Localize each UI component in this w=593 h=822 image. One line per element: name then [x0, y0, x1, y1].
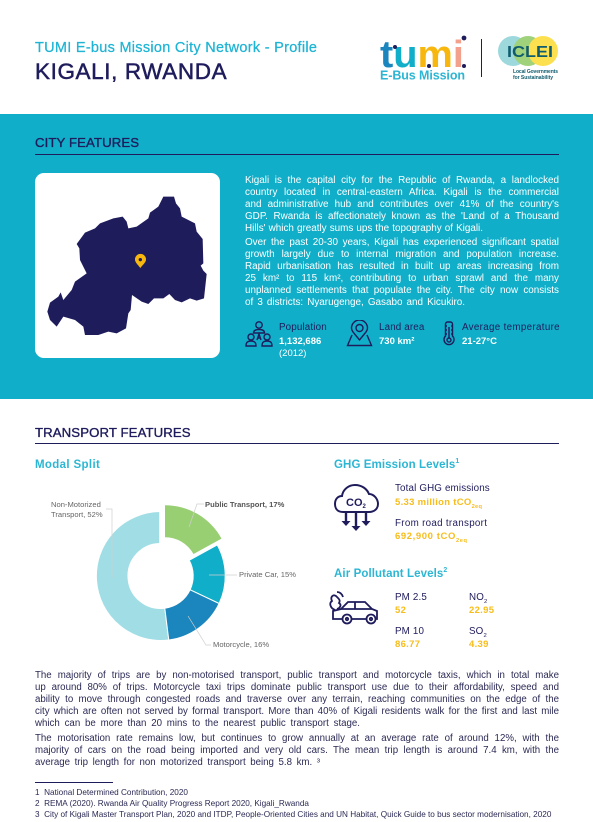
text: city description: of 3 districts: Nyarugenge, Gasabo and Kicukiro. — [245, 297, 465, 308]
stat: PM 2.5: 52 — [395, 605, 406, 616]
text: transport description: average trip length for non motorized transport being 5.8 km. ³ — [35, 757, 320, 768]
stat: total GHG emissions — [395, 483, 490, 510]
slice: public transport 17% — [165, 505, 222, 554]
map of Rwanda with Kigali pin — [47, 196, 207, 335]
subtitle: TUMI E-bus Mission City Network - Profile — [35, 40, 317, 56]
text: city description: unplanned settlements that populate the city. The city now consists — [245, 285, 559, 296]
stat: average temperature: 21-27°C — [462, 336, 497, 347]
stat: road transport emissions: 692,900 tCO2eq — [395, 531, 468, 544]
icon: CO2 cloud — [334, 484, 379, 531]
text: city description: GDP. Rwanda is affectionately known as the 'Land of a Thousand — [245, 211, 559, 222]
footnotes — [35, 782, 552, 819]
stat: road transport emissions — [395, 518, 487, 544]
logo: TUMI E-Bus Mission: tumi — [380, 34, 464, 76]
text: city description: and administrative hub and contributes over 41% of the country's — [245, 199, 559, 210]
label: non-motorized — [51, 500, 103, 519]
label: non-motorized: Non-Motorized — [51, 500, 101, 509]
text: city description: growth largely due to internal migration and population increase. — [245, 249, 559, 260]
stat: land area — [379, 322, 424, 347]
panel: city features — [0, 114, 593, 399]
stat: population: 1,132,686 — [279, 336, 321, 347]
text: city description — [245, 175, 559, 308]
stat: land area: 730 km² — [379, 336, 414, 347]
stat: SO2: 4.39 — [469, 639, 489, 650]
text: city description: Over the past 20-30 years, Kigali has experienced significant spatial — [245, 237, 559, 248]
stat: total GHG emissions: Total GHG emissions — [395, 483, 490, 494]
stat: NO2: 22.95 — [469, 605, 494, 616]
logo: ICLEI: for Sustainability — [513, 75, 553, 81]
header — [35, 34, 558, 84]
text: city description: Hills' which greatly sums ups the topography of Kigali. — [245, 223, 483, 234]
label: non-motorized: Transport, 52% — [51, 510, 103, 519]
divider — [481, 39, 482, 77]
chart: modal split donut — [96, 504, 237, 646]
stat: NO2 — [469, 592, 494, 616]
icon: land area — [346, 320, 372, 346]
heading: modal split: Modal Split — [35, 459, 100, 471]
stat: total GHG emissions: 5.33 million tCO2eq — [395, 497, 482, 510]
icon: population — [245, 321, 273, 347]
slice: non-motorized 52% — [96, 512, 169, 640]
icon: CO2 cloud: 2 — [362, 504, 366, 510]
stat: population: (2012) — [279, 348, 306, 359]
text: transport description: majority of cars on the road being imported and very old cars. The mean trip length is around 7.4 km, with the — [35, 745, 559, 756]
logo: ICLEI: ICLEI — [507, 44, 553, 61]
stat: population — [279, 322, 327, 359]
text: city description: 25 km² to 115 km², contributing to urban sprawl and the many — [245, 273, 559, 284]
slice: private car 15% — [189, 545, 225, 604]
stat: average temperature: Average temperature — [462, 322, 560, 333]
stat: land area: Land area — [379, 322, 424, 333]
heading: city features: CITY FEATURES — [35, 135, 139, 150]
footnotes: 2 REMA (2020). Rwanda Air Quality Progress Report 2020, Kigali_Rwanda — [35, 799, 309, 808]
text: transport description: city which are often not served by formal transport. More than 40% of Kigali residents walk for the first and last mile — [35, 706, 559, 717]
stat: PM 10: 86.77 — [395, 639, 420, 650]
stat: PM 2.5: PM 2.5 — [395, 592, 427, 603]
text: transport description: which can be more than 20 mins to the nearest public transport stage. — [35, 718, 360, 729]
logo: ICLEI: Local Governments — [513, 69, 558, 75]
stat: average temperature — [462, 322, 560, 347]
stat: PM 10: PM 10 — [395, 626, 424, 637]
text: city description: Rapid urbanisation has resulted in built up areas increasing from — [245, 261, 559, 272]
label: private car: Private Car, 15% — [239, 570, 296, 579]
heading: transport features: TRANSPORT FEATURES — [35, 425, 191, 440]
map card — [35, 173, 220, 358]
stat: PM 10 — [395, 626, 424, 650]
heading: air pollutant: Air Pollutant Levels2 — [334, 567, 447, 580]
label: motorcycle: Motorcycle, 16% — [213, 640, 269, 649]
icon: CO2 cloud: CO — [346, 497, 362, 509]
text: city description: Kigali is the capital city for the Republic of Rwanda, a landlocked — [245, 175, 559, 186]
label: public transport: Public Transport, 17% — [205, 500, 284, 509]
stat: SO2 — [469, 626, 489, 650]
stat: SO2: SO2 — [469, 626, 487, 639]
icon: thermometer — [443, 321, 455, 346]
footnotes: 3 City of Kigali Master Transport Plan, 2020 and ITDP, People-Oriented Cities and UN Habitat, Quick Guide to bus sector modernisation, 2020 — [35, 810, 551, 819]
title: KIGALI, RWANDA — [35, 59, 227, 84]
text: transport description: The motorisation rate remains low, but continues to grow annually at an average rate of around 12%, with the — [35, 733, 559, 744]
stat: population: Population — [279, 322, 327, 333]
logo: TUMI E-Bus Mission: E-Bus Mission — [380, 68, 465, 82]
logo: ICLEI — [498, 36, 558, 81]
stat: NO2: NO2 — [469, 592, 487, 605]
slice: motorcycle 16% — [165, 590, 219, 640]
stat: PM 2.5 — [395, 592, 427, 616]
heading: GHG: GHG Emission Levels1 — [334, 458, 459, 471]
text: city description: country located in central-eastern Africa. Kigali is the commercial — [245, 187, 559, 198]
text: transport description: The majority of trips are by non-motorised transport, public transport and motorcycle taxis, which in total make — [35, 670, 559, 681]
footnotes: 1 National Determined Contribution, 2020 — [35, 788, 188, 797]
text: transport description: up around 80% of trips. Motorcycle taxi trips dominate public transport use due to their affordability, speed and — [35, 682, 559, 693]
icon: car with exhaust — [329, 591, 378, 624]
stat: road transport emissions: From road transport — [395, 518, 487, 529]
text: transport description: ability to move through congested roads and traverse over any terrain, reaching communities on the edge of the — [35, 694, 559, 705]
